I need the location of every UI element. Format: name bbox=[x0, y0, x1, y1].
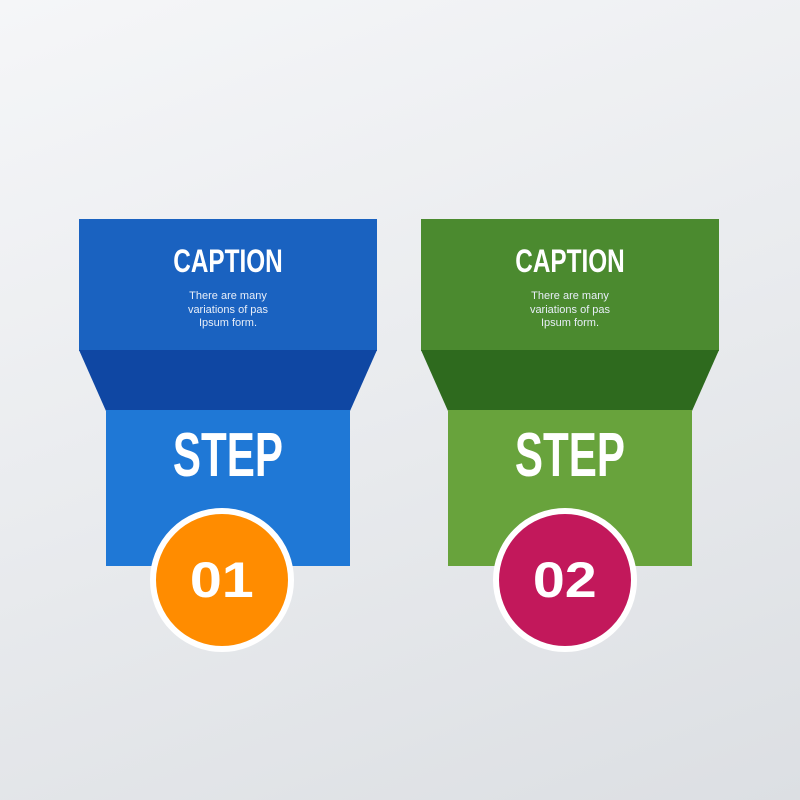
folded ribbon shapes green bbox=[421, 219, 719, 566]
step label 1: STEP bbox=[173, 421, 283, 490]
text block 2: variations of pas bbox=[530, 304, 610, 316]
badge: 02: 02 bbox=[533, 552, 597, 608]
text block 1: variations of pas bbox=[188, 304, 268, 316]
badge: 01: 01 bbox=[190, 552, 254, 608]
text block 2 bbox=[530, 290, 610, 329]
badge: 01 bbox=[150, 508, 294, 652]
badge: 02 bbox=[493, 508, 637, 652]
text block 1: Ipsum form. bbox=[199, 317, 257, 329]
heading: caption 1: CAPTION bbox=[173, 243, 283, 279]
text block 1 bbox=[188, 290, 268, 329]
step label 2: STEP bbox=[515, 421, 625, 490]
text block 2: Ipsum form. bbox=[541, 317, 599, 329]
heading: caption 2: CAPTION bbox=[515, 243, 625, 279]
panel: step 1 bbox=[79, 219, 377, 652]
panel: step 2 bbox=[421, 219, 719, 652]
folded ribbon shapes blue bbox=[79, 219, 377, 566]
text block 1: There are many bbox=[189, 290, 267, 302]
text block 2: There are many bbox=[531, 290, 609, 302]
